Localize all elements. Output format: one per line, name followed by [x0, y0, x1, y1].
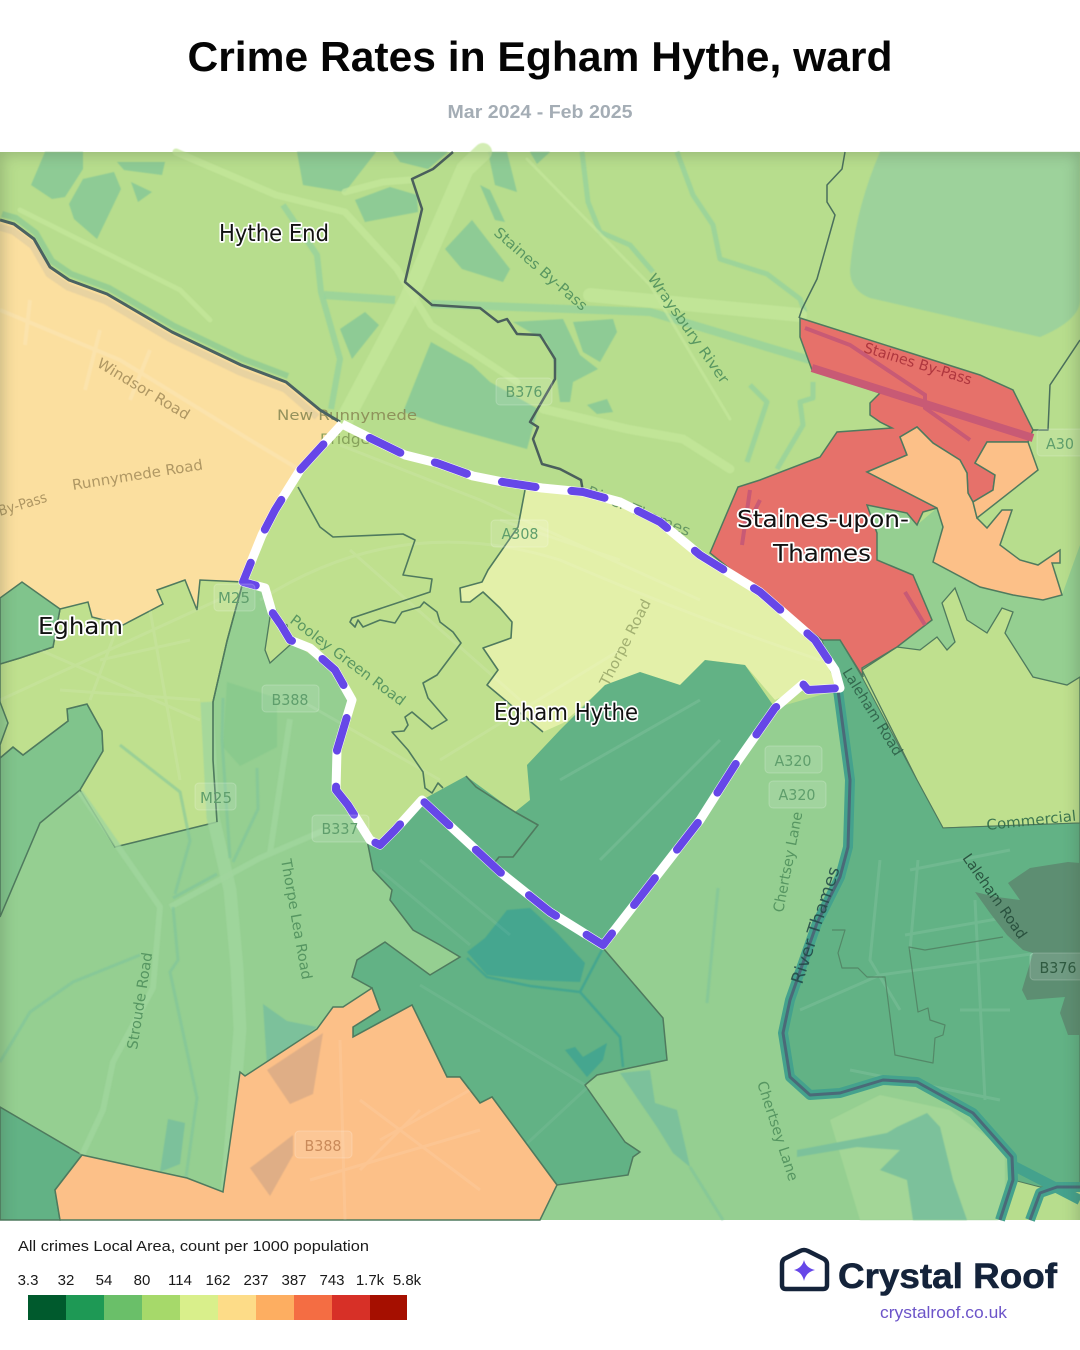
road and river labels: Thorpe Road: [597, 597, 655, 690]
road and river labels: Commercial: [986, 809, 1077, 834]
logo wordmark: Crystal Roof: [838, 1257, 1057, 1296]
map: internal ward boundaries: [298, 487, 543, 868]
road shields: M25: [200, 789, 232, 807]
map: north canals and streams: [283, 152, 813, 469]
map zone: small wedge west of ward: [265, 617, 290, 663]
road shields: [195, 378, 1080, 1158]
map zone: south-east dark green: [783, 640, 1080, 1187]
map zone: south-west green: [0, 580, 460, 1192]
map: M25 boundary line: [213, 582, 243, 822]
legend: 114: [168, 1272, 192, 1289]
road and river labels: Chertsey Lane: [753, 1079, 801, 1183]
map zone: east green: [867, 505, 1080, 685]
road shields: B388: [272, 691, 308, 709]
legend: 54: [96, 1272, 112, 1289]
map: riverbank strip: [0, 227, 317, 417]
map zone: south-west corner dark: [0, 1107, 82, 1220]
legend: 237: [243, 1272, 269, 1289]
ward boundary white: [243, 424, 840, 945]
road and river labels: Staines By-Pass: [862, 341, 974, 389]
labels under ward line: New Runnymede Bridge and River Thames: River Thames: [585, 484, 692, 540]
website url: crystalroof.co.uk: [880, 1304, 1008, 1322]
map: yellow area roads: [0, 300, 300, 470]
map zone: Egham light green: [0, 580, 243, 847]
map zone: south dark green: [352, 800, 667, 1185]
map: south-west parks and water: [223, 682, 277, 766]
map: south-east internal boundary: [832, 930, 1003, 1063]
road and river labels: Laleham Road: [959, 851, 1029, 942]
labels under ward line: New Runnymede Bridge and River Thames: [277, 408, 692, 540]
map zone: ward dark green: [422, 660, 775, 948]
road shields: B376: [506, 383, 542, 401]
map zone: ward pale yellow: [460, 490, 838, 732]
legend: 387: [281, 1272, 307, 1289]
map: orange area parks and streets: [250, 1033, 323, 1196]
map zone: west darker green: [0, 704, 103, 917]
icon: crystal roof logo house: [782, 1250, 827, 1289]
place labels: Hythe End: [219, 221, 329, 247]
labels under ward line: New Runnymede Bridge and River Thames: Bridge: [320, 432, 370, 448]
road shields: B376: [1040, 959, 1076, 977]
road shields: M25: [218, 589, 250, 607]
map: [0, 152, 1080, 1220]
map zone: south orange: [55, 988, 557, 1220]
map: north lakes and water: [31, 152, 1080, 449]
legend: 3.3: [18, 1272, 38, 1289]
map: rivers and boundaries: [0, 152, 1080, 1220]
road and river labels: Chertsey Lane: [771, 811, 806, 914]
road and river labels: Windsor Road: [94, 356, 192, 424]
road and river labels: Runnymede Road: [71, 457, 204, 494]
place labels: [38, 221, 909, 726]
road and river labels: Pooley Green Road: [287, 612, 408, 709]
legend: 162: [205, 1272, 231, 1289]
road and river labels: Stroude Road: [125, 951, 156, 1051]
road shields: A320: [774, 752, 812, 770]
map zone: Staines red: [710, 318, 1033, 677]
title: Crime Rates in Egham Hythe, ward: [188, 33, 892, 80]
map zone: south-east darker area: [975, 862, 1080, 1035]
road shields: A320: [778, 786, 816, 804]
road and river labels: Laleham Road: [839, 666, 905, 759]
place labels: Egham Hythe: [494, 700, 638, 726]
map zone: ward base light green: [243, 424, 838, 948]
road and river labels: Wraysbury River: [644, 271, 731, 387]
map: south central lakes and streams: [830, 1095, 1005, 1220]
road shields: B388: [304, 1137, 342, 1155]
subtitle: date range: Mar 2024 - Feb 2025: [448, 101, 632, 122]
map zone: Egham yellow area: [0, 220, 340, 625]
map: Egham streets: [0, 590, 240, 780]
map zone: east light green: [862, 588, 1080, 828]
labels under ward line: New Runnymede Bridge and River Thames: New Runnymede: [277, 408, 417, 424]
map: south lakes: [467, 908, 585, 982]
map zone: Egham west patch: [0, 582, 60, 664]
map: M25 and roads south-west: [80, 702, 327, 1192]
map: ward streets: [260, 445, 820, 860]
legend: 5.8k: [393, 1272, 422, 1289]
road shields: B337: [322, 820, 358, 838]
road shields: A30: [1046, 435, 1074, 453]
place labels: Thames: [772, 541, 871, 567]
legend: [18, 1272, 422, 1320]
legend: 80: [134, 1272, 150, 1289]
legend: 32: [58, 1272, 74, 1289]
map zone: south central green: [540, 690, 1013, 1220]
legend: 1.7k: [356, 1272, 385, 1289]
road and river labels: [0, 225, 1077, 1183]
ward boundary purple dashes: [243, 424, 840, 945]
place labels: Staines-upon-: [737, 507, 909, 533]
road shields: A308: [502, 525, 538, 543]
road and river labels: Staines By-Pass: [490, 225, 590, 314]
road and river labels: Thorpe Lea Road: [277, 857, 314, 981]
legend title: All crimes Local Area, count per 1000 population: [18, 1238, 369, 1255]
place labels: Egham: [38, 614, 123, 640]
map zone: Staines orange: [867, 427, 1062, 600]
map: north roads: [20, 152, 800, 469]
map: south-east streets: [800, 850, 1060, 1100]
road and river labels: River Thames: [788, 864, 844, 987]
legend: 743: [319, 1272, 345, 1289]
